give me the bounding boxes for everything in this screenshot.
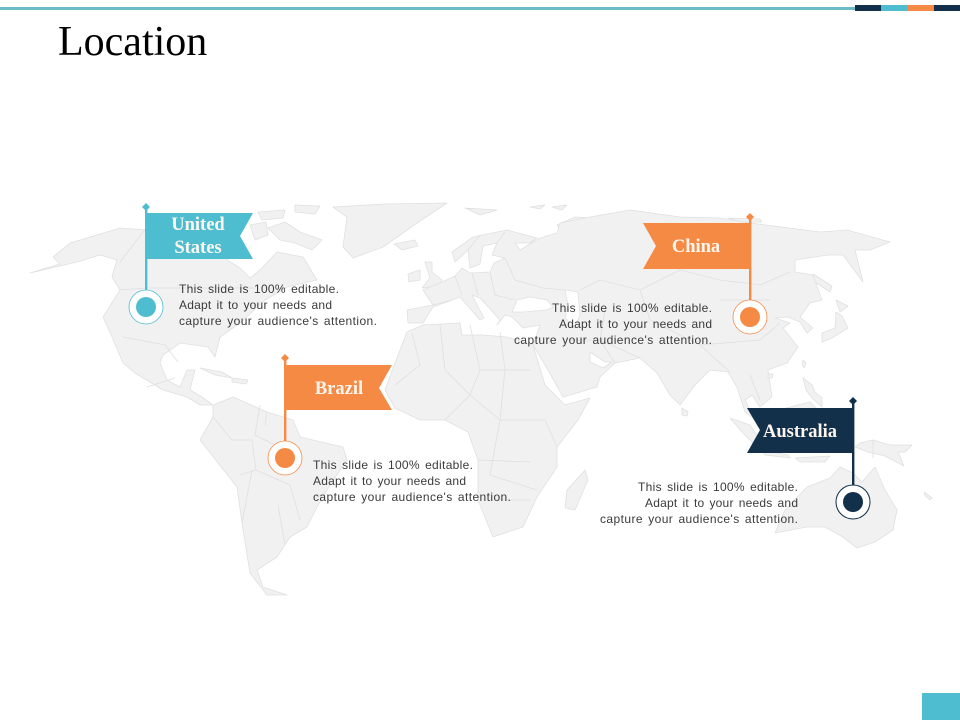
- description: China: Adapt it to your needs and: [559, 317, 712, 331]
- banner label: Australia: [763, 422, 837, 442]
- flag: Australia: [747, 397, 870, 519]
- title: Location: [58, 19, 207, 65]
- banner: [146, 213, 253, 259]
- flag: Brazil: [268, 354, 392, 475]
- description: United States: This slide is 100% editable.: [179, 282, 339, 296]
- map: Australia: [775, 467, 897, 548]
- banner label: United: [171, 215, 225, 235]
- description: Australia: Adapt it to your needs and: [645, 496, 798, 510]
- map: Taiwan and Hainan: [768, 360, 806, 378]
- map: Black Sea: [512, 297, 553, 312]
- description: United States: capture your audience's attention.: [179, 314, 377, 328]
- map: Svalbard and Arctic Russia islands: [465, 205, 762, 233]
- top accent bar: [0, 5, 960, 11]
- map: Caspian Sea: [565, 290, 580, 328]
- map: Java: [762, 450, 830, 462]
- location marker: [129, 290, 163, 324]
- pole diamond: [746, 213, 754, 221]
- map: Madagascar: [565, 470, 588, 510]
- world map: [30, 203, 932, 595]
- description: China: capture your audience's attention.: [514, 333, 712, 347]
- map: New Guinea: [855, 440, 912, 466]
- pole: [852, 402, 854, 488]
- banner: [747, 408, 853, 453]
- description: Australia: [600, 480, 798, 526]
- map: Africa: [385, 323, 590, 537]
- map: Sumatra: [730, 418, 760, 447]
- description: Australia: This slide is 100% editable.: [638, 480, 798, 494]
- map: South America: [200, 397, 347, 595]
- map: New Zealand: [924, 492, 932, 500]
- description: Brazil: capture your audience's attention.: [313, 490, 511, 504]
- pole: [145, 208, 147, 292]
- banner label: China: [672, 237, 720, 257]
- map: Sri Lanka: [682, 408, 688, 416]
- banner label: Brazil: [315, 379, 363, 399]
- pole: [284, 359, 286, 443]
- map: Ireland and Britain: [408, 262, 442, 288]
- description: Australia: capture your audience's attention.: [600, 512, 798, 526]
- map: Greenland: [333, 203, 447, 258]
- description: Brazil: This slide is 100% editable.: [313, 458, 473, 472]
- map: Borneo: [778, 402, 816, 425]
- map: North America: [30, 220, 317, 405]
- description: China: [514, 301, 712, 347]
- location marker: [268, 441, 302, 475]
- description: Brazil: [313, 458, 511, 504]
- map: Cuba and Caribbean: [200, 368, 248, 384]
- pole diamond: [142, 203, 150, 211]
- pole: [749, 218, 751, 302]
- map: Eurasia: [407, 210, 890, 420]
- map: Iceland: [394, 240, 418, 250]
- banner label line 2: States: [174, 238, 222, 258]
- corner square: [922, 693, 960, 720]
- banner: [285, 365, 392, 410]
- map: country borders: [120, 228, 873, 545]
- location marker: [836, 485, 870, 519]
- flag: China: [643, 213, 767, 334]
- description: China: This slide is 100% editable.: [552, 301, 712, 315]
- map: Japan: [822, 300, 848, 342]
- description: Brazil: Adapt it to your needs and: [313, 474, 466, 488]
- description: United States: Adapt it to your needs and: [179, 298, 332, 312]
- location marker: [733, 300, 767, 334]
- flag: United States: [129, 203, 253, 324]
- banner: [643, 223, 750, 269]
- map: Arctic islands: [250, 205, 322, 250]
- description: United States: [179, 282, 377, 328]
- map: Philippines: [803, 378, 822, 407]
- pole diamond: [849, 397, 857, 405]
- map: Sakhalin: [813, 274, 832, 292]
- map: Persian Gulf: [590, 352, 612, 368]
- pole diamond: [281, 354, 289, 362]
